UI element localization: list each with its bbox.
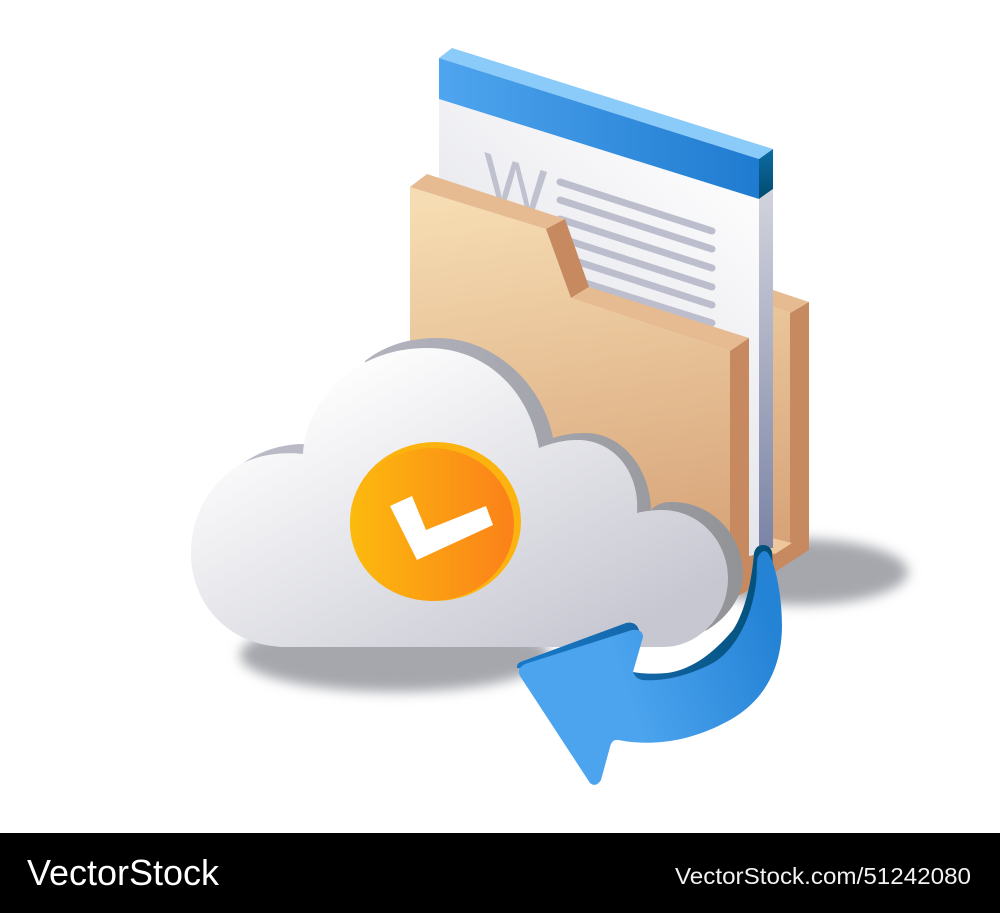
folder side — [730, 338, 749, 600]
ground shadow: right — [692, 539, 908, 605]
badge front — [350, 448, 514, 601]
document side edge — [759, 189, 773, 548]
document text lines — [560, 182, 712, 323]
folder top edge — [571, 287, 749, 351]
check badge — [350, 442, 521, 601]
footer url: VectorStock.com/51242080 — [675, 863, 971, 889]
footer logo: VectorStock — [27, 852, 220, 893]
badge back — [350, 442, 521, 601]
return arrow — [517, 545, 782, 785]
footer bar — [0, 833, 1000, 913]
document W letter: W — [484, 138, 547, 233]
arrow back edge — [517, 545, 775, 705]
folder face — [410, 187, 730, 600]
folder back panel — [738, 290, 809, 596]
folder front — [410, 174, 749, 600]
arrow front — [519, 551, 782, 785]
document blue header side — [759, 149, 773, 199]
folder tab top — [410, 174, 565, 229]
folder notch — [546, 219, 589, 298]
ground shadow: cloud — [240, 618, 550, 692]
check mark — [390, 496, 493, 560]
document blue header front — [439, 58, 759, 199]
cloud — [191, 338, 743, 647]
cloud back shadow — [243, 338, 743, 647]
document blue header top — [439, 48, 773, 159]
document page — [439, 99, 759, 560]
cloud body — [191, 348, 728, 647]
document — [439, 48, 773, 560]
